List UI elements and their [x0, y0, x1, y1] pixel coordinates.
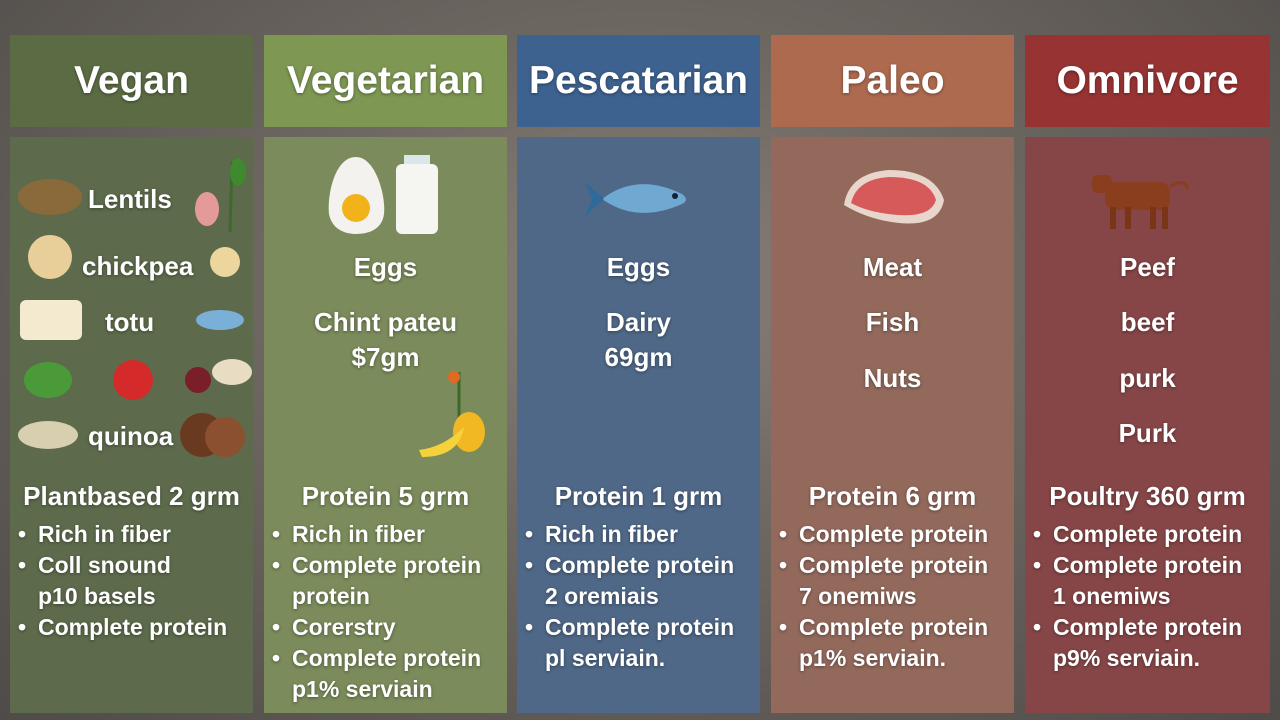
bullets: omnivore: 1 onemiws [1053, 583, 1171, 609]
panel: paleo: Nuts [864, 363, 921, 393]
header: Vegan: Vegan [74, 59, 189, 102]
protein line: omnivore: Poultry 360 grm [1049, 481, 1246, 511]
bullets: omnivore: Complete protein [1053, 614, 1242, 640]
panel: omnivore [1025, 137, 1270, 713]
icon: steak [844, 170, 944, 224]
panel: vegetarian: $7gm [352, 342, 419, 372]
bullets: vegetarian: protein [292, 583, 370, 609]
protein line: vegetarian: Protein 5 grm [302, 481, 469, 511]
header: Omnivore [1025, 35, 1270, 127]
bullets: pescatarian: Complete protein [545, 552, 734, 578]
panel: vegan [10, 137, 253, 713]
panel: vegan: Lentils [88, 184, 172, 214]
panel: vegan: totu [105, 307, 154, 337]
bullets: paleo: Complete protein [799, 521, 988, 547]
food list: pescatarian [604, 252, 672, 374]
bullets: paleo: Complete protein [799, 614, 988, 640]
bullets: vegetarian: Complete protein [292, 645, 481, 671]
bullets: pescatarian [524, 521, 734, 673]
bullets: omnivore: p9% serviain. [1053, 645, 1200, 671]
header: Paleo: Paleo [840, 59, 945, 102]
icon: fish [585, 182, 686, 216]
header: Vegetarian [264, 35, 507, 127]
bullets: vegan: Coll snound [38, 552, 171, 578]
bullets: pescatarian: pl serviain. [545, 645, 665, 671]
bullets: vegan: Rich in fiber [38, 521, 171, 547]
panel: pescatarian: 69gm [605, 342, 672, 372]
bullets: vegetarian [272, 521, 482, 704]
panel: vegan: chickpea [82, 251, 193, 281]
panel: omnivore: beef [1121, 307, 1174, 337]
header: Omnivore: Omnivore [1056, 59, 1239, 102]
icon: fruit [419, 371, 485, 457]
protein line: paleo: Protein 6 grm [809, 481, 976, 511]
panel: vegetarian [264, 137, 507, 713]
bullets: vegetarian: Corerstry [292, 614, 396, 640]
panel: paleo: Meat [863, 252, 922, 282]
bullets: vegetarian: p1% serviain [292, 676, 433, 702]
bullets: paleo: p1% serviain. [799, 645, 946, 671]
bullets: vegan [18, 521, 227, 642]
bullets: vegetarian: Complete protein [292, 552, 481, 578]
panel: omnivore: Purk [1119, 418, 1176, 448]
bullets: paleo: 7 onemiws [799, 583, 917, 609]
panel: vegetarian: Eggs [354, 252, 417, 282]
bullets: paleo [778, 521, 988, 674]
panel: pescatarian: Dairy [606, 307, 671, 337]
protein line: pescatarian: Protein 1 grm [555, 481, 722, 511]
icon: cow [1092, 175, 1190, 229]
bullets: vegan: p10 basels [38, 583, 156, 609]
food list: omnivore [1118, 252, 1176, 448]
panel: vegan: quinoa [88, 421, 173, 451]
bullets: omnivore [1032, 521, 1242, 673]
bullets: pescatarian: Complete protein [545, 614, 734, 640]
bullets: vegan: Complete protein [38, 614, 227, 640]
food list: paleo [863, 252, 923, 393]
bullets: vegetarian: Rich in fiber [292, 521, 425, 547]
bullets: omnivore: Complete protein [1053, 521, 1242, 547]
bullets: pescatarian: 2 oremiais [545, 583, 659, 609]
panel: vegetarian: Chint pateu [314, 307, 457, 337]
panel: omnivore: purk [1119, 363, 1176, 393]
food list: vegan [82, 184, 194, 452]
protein line: vegan: Plantbased 2 grm [23, 481, 240, 511]
bullets: paleo: Complete protein [799, 552, 988, 578]
header: Paleo [771, 35, 1014, 127]
bullets: pescatarian: Rich in fiber [545, 521, 678, 547]
food list: vegetarian [314, 252, 457, 374]
icon: egg and milk [328, 155, 438, 234]
panel: pescatarian [517, 137, 760, 713]
header: Vegetarian: Vegetarian [287, 59, 484, 102]
panel: omnivore: Peef [1120, 252, 1175, 282]
panel: paleo [771, 137, 1014, 713]
panel: paleo: Fish [866, 307, 919, 337]
header: Vegan [10, 35, 253, 127]
icon: vegan foods [18, 158, 252, 457]
header: Pescatarian: Pescatarian [529, 59, 748, 102]
panel: pescatarian: Eggs [607, 252, 670, 282]
bullets: omnivore: Complete protein [1053, 552, 1242, 578]
header: Pescatarian [517, 35, 760, 127]
